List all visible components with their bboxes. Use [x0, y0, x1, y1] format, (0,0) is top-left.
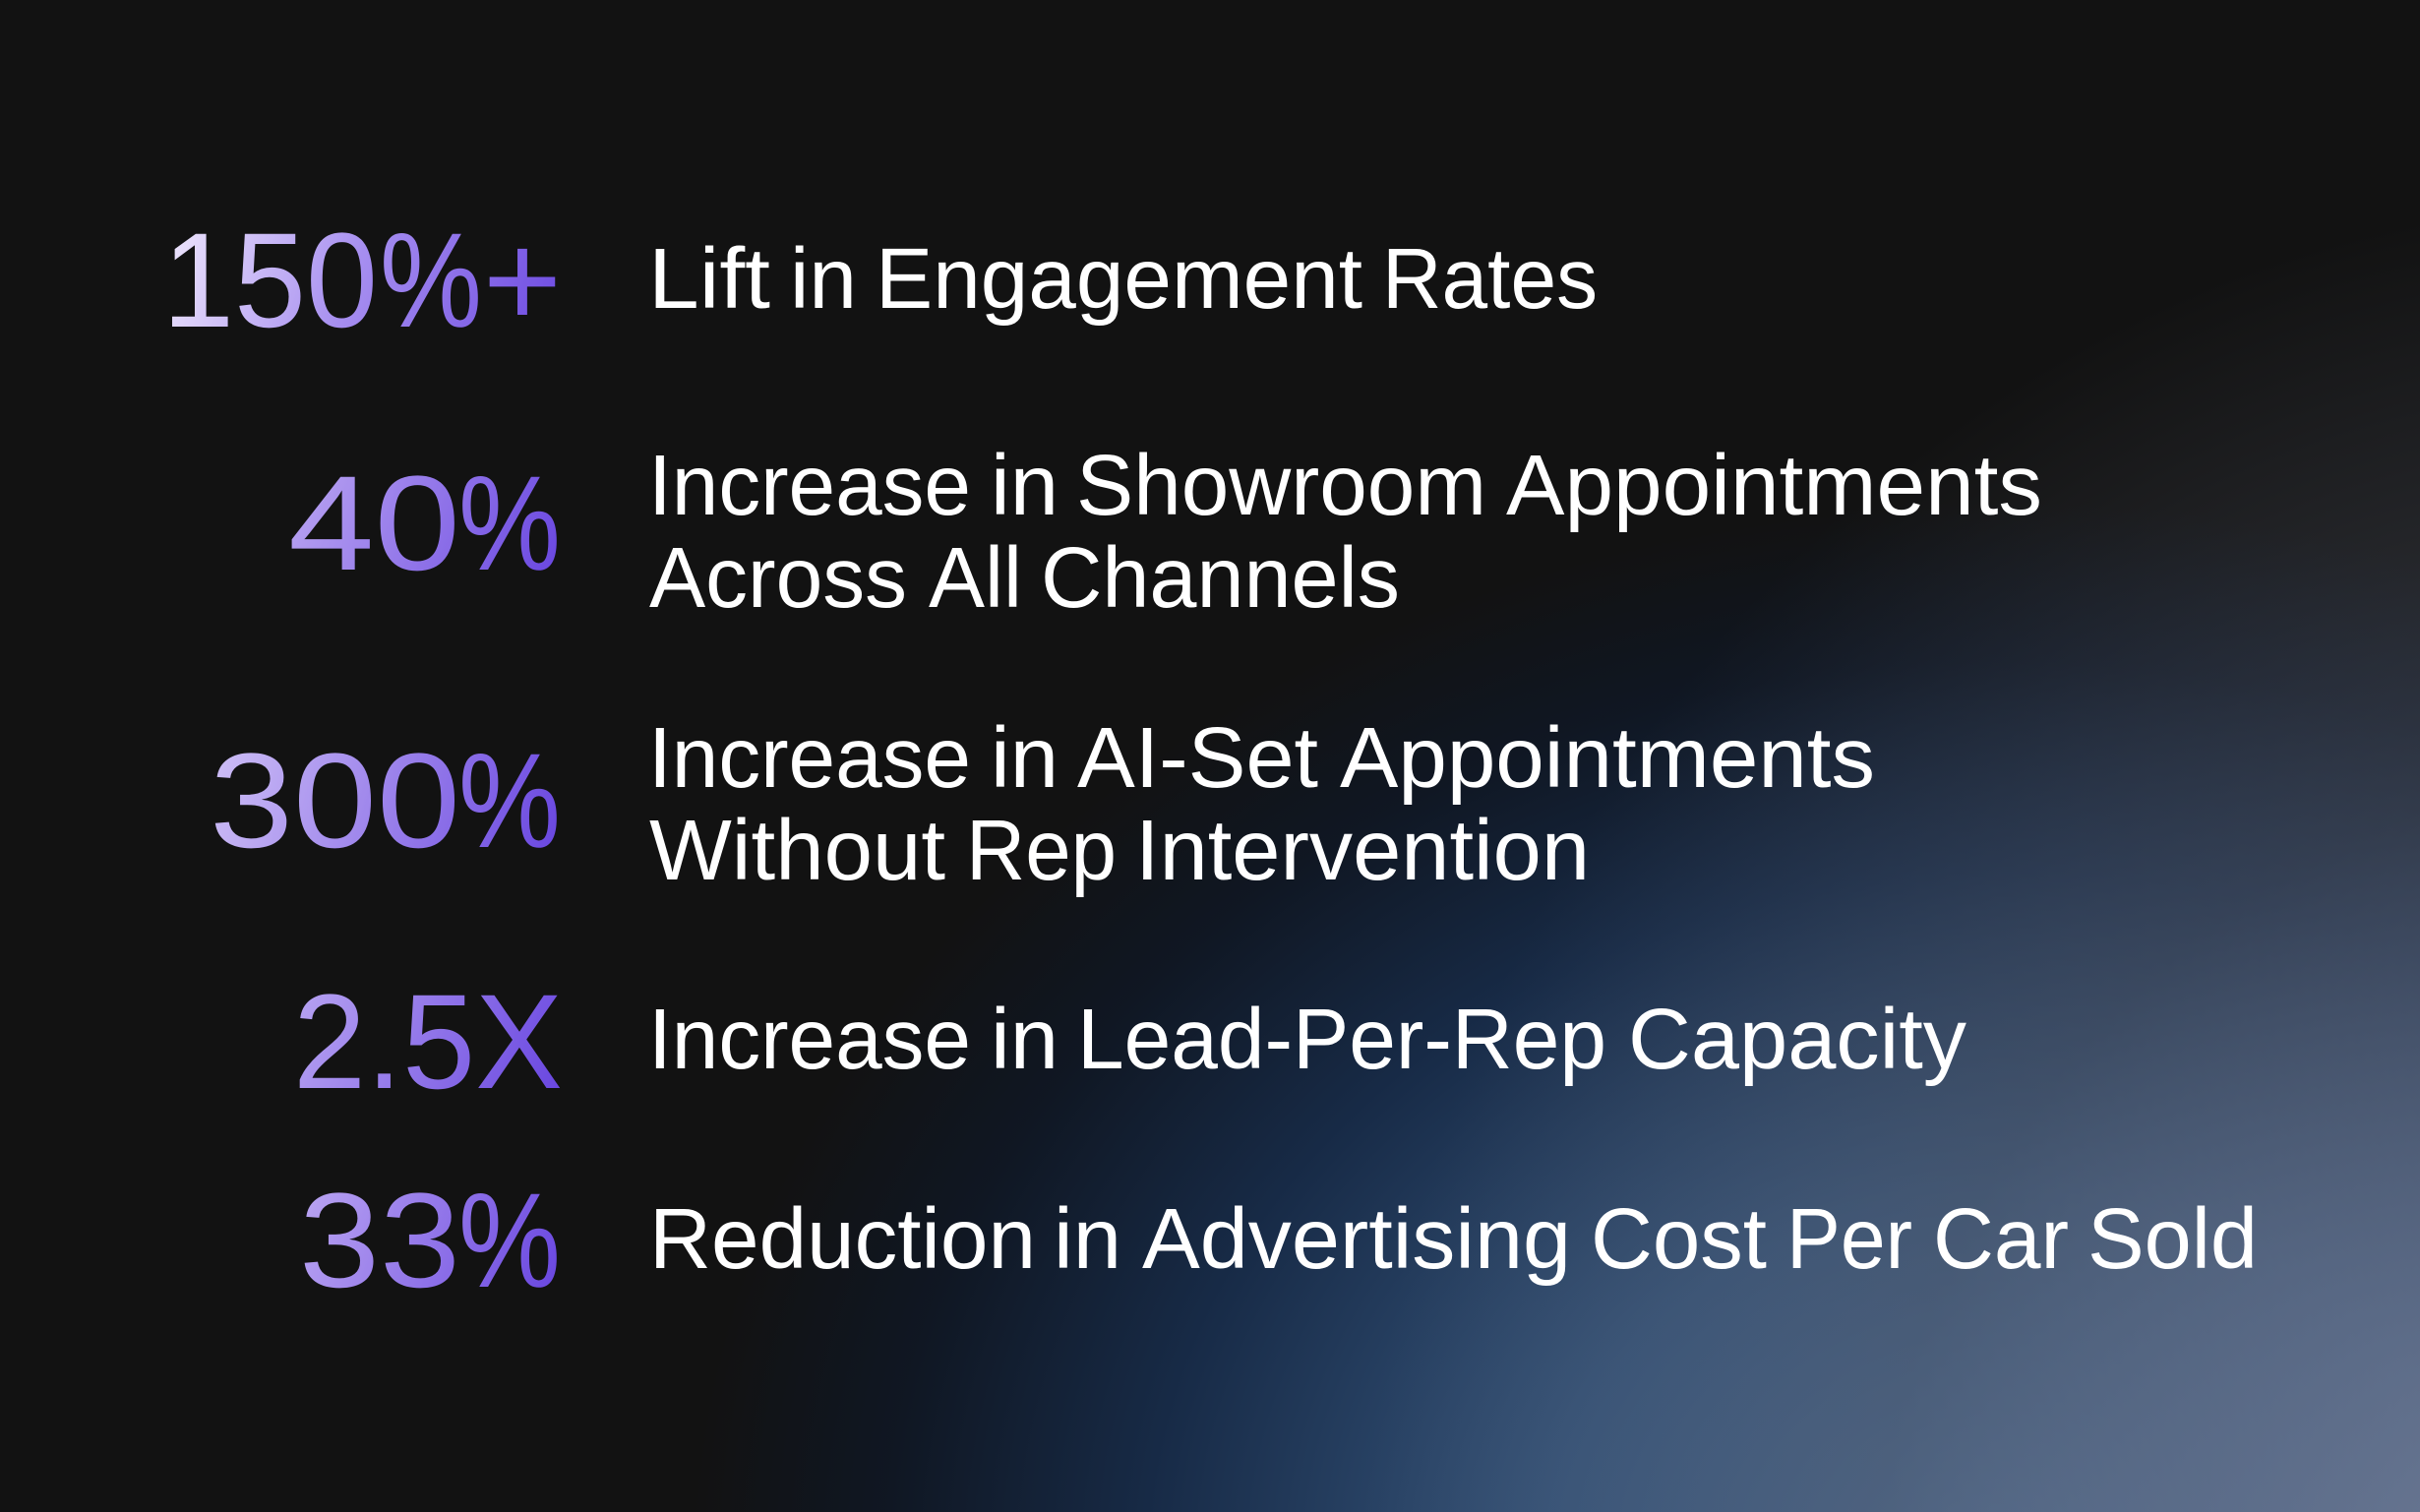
stat: 150%+: %: [380, 206, 482, 356]
label: showroom appointments: Channels: [1041, 530, 1400, 626]
stat: 300%: %: [458, 726, 561, 877]
label: AI-set appointments: Increase: [648, 710, 971, 806]
label: AI-set appointments: AI-Set: [1077, 710, 1318, 806]
label: showroom appointments: Appointments: [1506, 438, 2042, 533]
label: showroom appointments: in: [991, 438, 1059, 533]
label: AI-set appointments: Rep: [966, 803, 1117, 898]
label: AI-set appointments: Appointments: [1340, 710, 1875, 806]
row: advertising cost: [299, 1166, 2258, 1316]
stat: 150%+: 150: [162, 206, 378, 356]
label: lead-per-rep capacity: in: [991, 992, 1059, 1087]
label: advertising cost: Cost: [1591, 1191, 1767, 1287]
label: advertising cost: Sold: [2087, 1191, 2258, 1287]
stat: 150%+: +: [483, 206, 562, 356]
label: showroom appointments: All: [929, 530, 1022, 626]
label: lift in engagement rates: in: [790, 231, 857, 327]
label: AI-set appointments: [648, 710, 1875, 898]
stat: 40%: 40: [288, 449, 460, 599]
label: advertising cost: Car: [1933, 1191, 2069, 1287]
label: AI-set appointments: Intervention: [1135, 803, 1590, 898]
stat: 33%: 33: [299, 1166, 460, 1316]
label: lift in engagement rates: Lift: [648, 231, 770, 327]
label: advertising cost: in: [1054, 1191, 1121, 1287]
label: showroom appointments: [648, 438, 2042, 626]
label: lead-per-rep capacity: Increase: [648, 992, 971, 1087]
label: advertising cost: Per: [1786, 1191, 1912, 1287]
label: showroom appointments: Across: [649, 530, 907, 626]
stat: 33%: %: [458, 1166, 561, 1316]
row: AI-set appointments: [210, 710, 1875, 898]
row: showroom appointments: [288, 438, 2042, 626]
stat: 40%: %: [458, 449, 561, 599]
label: showroom appointments: Showroom: [1076, 438, 1486, 533]
label: advertising cost: Advertising: [1142, 1191, 1571, 1287]
label: lead-per-rep capacity: Capacity: [1628, 992, 1967, 1087]
label: lift in engagement rates: Engagement: [876, 231, 1362, 327]
label: AI-set appointments: Without: [649, 803, 945, 898]
label: lift in engagement rates: Rates: [1382, 231, 1598, 327]
label: lead-per-rep capacity: Lead-Per-Rep: [1077, 992, 1606, 1087]
label: showroom appointments: Increase: [648, 438, 971, 533]
row: lift in engagement rates: [162, 206, 1598, 356]
label: AI-set appointments: in: [991, 710, 1059, 806]
label: advertising cost: Reduction: [649, 1191, 1036, 1287]
stat: 300%: 300: [210, 726, 460, 877]
stat: 2.5X: 2.5X: [293, 967, 563, 1118]
row: lead-per-rep capacity: [293, 967, 1967, 1118]
